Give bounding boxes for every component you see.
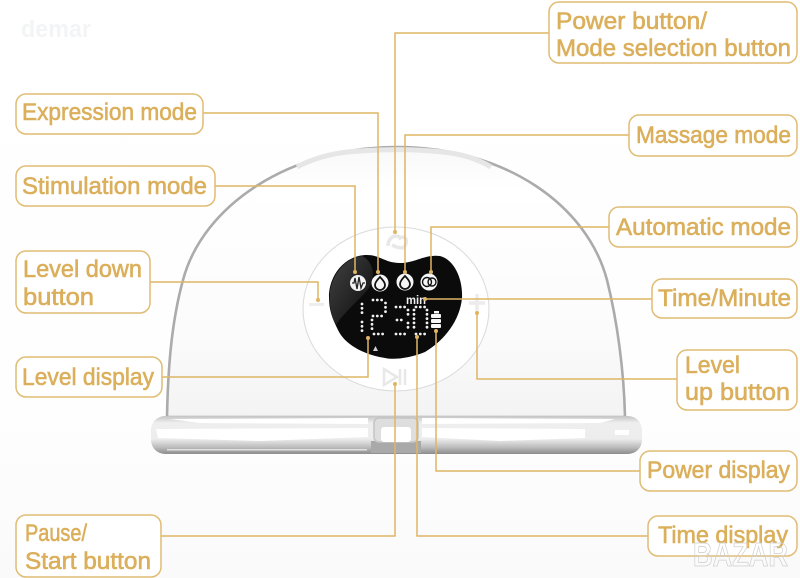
device: breast pump body bbox=[151, 147, 642, 454]
connector: power button bbox=[395, 33, 549, 232]
min label: min bbox=[406, 293, 426, 307]
label: power button / mode selection button: Power button/ bbox=[556, 8, 707, 35]
mode icon: expression bbox=[372, 274, 388, 292]
button glyph: level up bbox=[469, 294, 485, 311]
connector endpoints bbox=[316, 230, 479, 386]
label: stimulation mode: Stimulation mode bbox=[22, 173, 207, 200]
mode icon: stimulation bbox=[350, 275, 366, 291]
label: stimulation mode bbox=[16, 166, 215, 206]
label: level down button bbox=[16, 251, 150, 313]
label: pause/start button bbox=[16, 515, 161, 577]
button glyph: power bbox=[388, 236, 406, 248]
label: time/minute bbox=[652, 279, 797, 318]
label: expression mode bbox=[16, 94, 203, 134]
LED time digits bbox=[362, 300, 427, 334]
connector: time display bbox=[417, 337, 648, 536]
label: power display bbox=[640, 451, 797, 491]
connector: power display bbox=[436, 331, 640, 471]
label: level up button: Level bbox=[685, 352, 740, 379]
dome shell bbox=[167, 147, 625, 417]
connector: massage mode bbox=[405, 135, 629, 272]
label: massage mode bbox=[629, 115, 797, 156]
level marker bbox=[373, 346, 378, 351]
base bbox=[151, 416, 642, 454]
label: automatic mode bbox=[609, 207, 797, 247]
display panel bbox=[329, 255, 462, 359]
label: power button / mode selection button bbox=[549, 2, 797, 63]
label: level display bbox=[16, 357, 162, 397]
control panel ring bbox=[303, 227, 489, 391]
label: level up button: up button bbox=[685, 379, 790, 406]
label: pause/start button: Start button bbox=[25, 548, 151, 575]
label: level down button: button bbox=[23, 284, 94, 311]
label: power button / mode selection button: Mode selection button bbox=[556, 35, 791, 62]
label: level display: Level display bbox=[22, 364, 154, 391]
screen glare bbox=[330, 256, 373, 325]
mode icon: automatic bbox=[420, 274, 438, 290]
label: automatic mode: Automatic mode bbox=[616, 214, 791, 241]
label: time display bbox=[648, 516, 797, 556]
label: power display: Power display bbox=[647, 457, 790, 484]
button glyph: pause/start bbox=[384, 369, 405, 385]
connector: stimulation mode bbox=[215, 186, 355, 272]
button glyph: level down bbox=[309, 303, 324, 306]
label: level up button bbox=[677, 350, 797, 410]
connector: pause/start bbox=[161, 384, 395, 536]
label: time display: Time display bbox=[658, 522, 788, 549]
label: expression mode: Expression mode bbox=[22, 99, 197, 126]
connector: level up bbox=[477, 313, 677, 379]
label: pause/start button: Pause/ bbox=[25, 520, 87, 547]
mode icon: massage bbox=[396, 274, 414, 290]
watermark: demar: demar bbox=[21, 16, 91, 43]
connector: automatic mode bbox=[431, 227, 609, 272]
connector: level display bbox=[162, 338, 368, 377]
label: massage mode: Massage mode bbox=[636, 122, 791, 149]
black display blob bbox=[329, 255, 462, 359]
label: time/minute: Time/Minute bbox=[658, 285, 791, 312]
top rim band bbox=[297, 150, 491, 167]
connector: level down bbox=[150, 282, 318, 300]
label: level down button: Level down bbox=[23, 256, 142, 283]
battery indicator bbox=[431, 311, 441, 328]
connector: expression mode bbox=[203, 113, 378, 272]
connector: time/minute bbox=[425, 298, 652, 300]
